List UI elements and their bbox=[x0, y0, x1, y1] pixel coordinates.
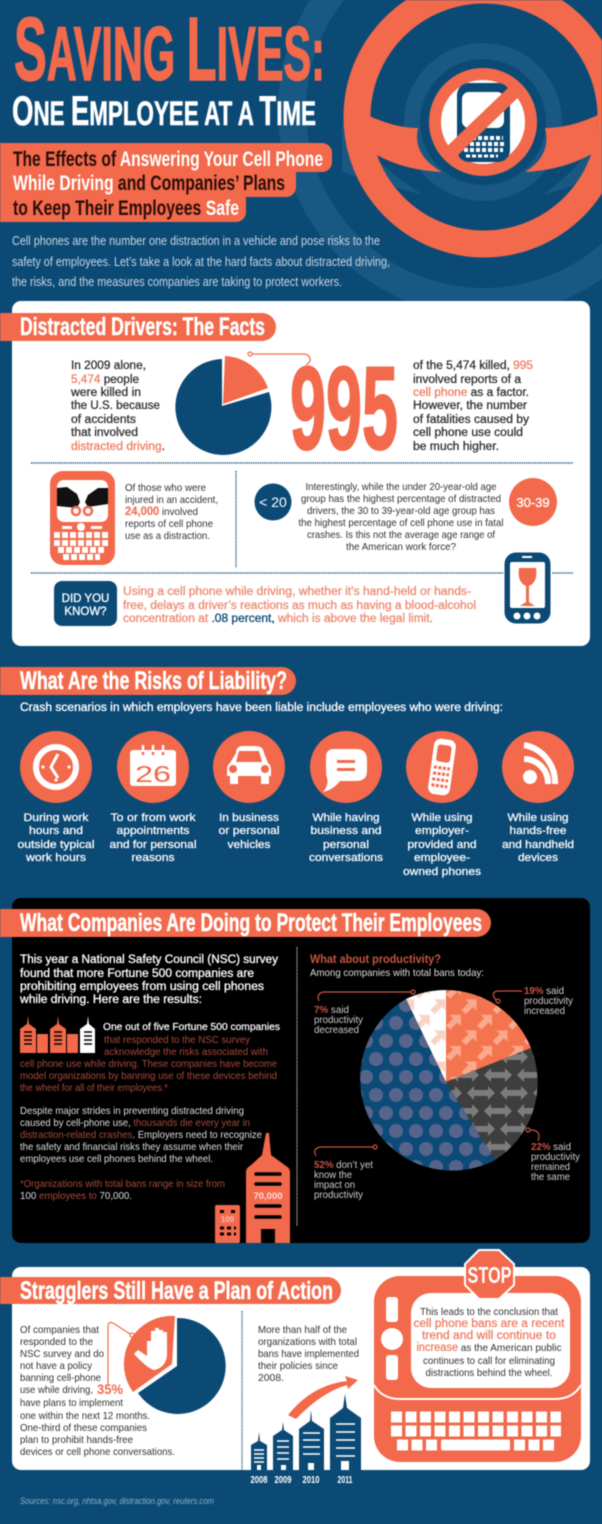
label: 22 percent: the same bbox=[531, 1172, 570, 1183]
text: despite major strides bbox=[20, 1105, 262, 1165]
text: age groups: the American work force? bbox=[346, 541, 456, 553]
text: one out of five: cell phone use while driving. These companies have become bbox=[20, 1058, 277, 1070]
icon: hand bbox=[134, 1328, 167, 1370]
icon: phone with car crash bbox=[50, 471, 115, 565]
title: SAVING LIVES: bbox=[14, 0, 325, 100]
text: stragglers plan: banning cell-phone bbox=[20, 1372, 101, 1384]
pie chart: 995 of 5474 bbox=[175, 356, 271, 455]
text: killed in 2009: that involved bbox=[71, 427, 138, 439]
scenario: work hours: work hours bbox=[25, 852, 87, 864]
scenario: hands-free: devices bbox=[518, 852, 559, 864]
text: since 2008: organizations with total bbox=[258, 1336, 357, 1348]
text: footnote: 100 employees to 70,000. bbox=[20, 1190, 132, 1202]
scenario: hands-free: and handheld bbox=[502, 839, 574, 851]
label: 19 percent bbox=[524, 986, 573, 1017]
did you know badge: DID YOU bbox=[62, 593, 109, 605]
scenario: appointments: To or from work bbox=[110, 812, 196, 824]
text: stragglers plan: plan to prohibit hands-free bbox=[20, 1434, 133, 1446]
badge: under 20 bbox=[254, 484, 292, 520]
text: stragglers plan: Of companies that bbox=[20, 1324, 99, 1336]
year labels: 2011 bbox=[338, 1475, 353, 1486]
text: despite major strides: the safety and financial risks they assume when their bbox=[20, 1141, 243, 1153]
did you know text: free, delays a driver’s reactions as much as having a blood-alcohol bbox=[123, 600, 476, 612]
badge: 30-39: 30-39 bbox=[516, 495, 550, 510]
scenario: phones: employer- bbox=[415, 825, 469, 837]
text: one out of five: One out of five Fortune 500 companies bbox=[103, 1021, 280, 1033]
label: 52 percent bbox=[314, 1160, 373, 1201]
text: conclusion bbox=[414, 1306, 565, 1379]
scenario: vehicles: vehicles bbox=[228, 839, 271, 851]
scenario: vehicles bbox=[213, 731, 285, 851]
text: NSC survey: found that more Fortune 500 companies are bbox=[20, 968, 254, 980]
text: one out of five: that responded to the NSC survey bbox=[104, 1034, 251, 1046]
text: cell phone factor: involved reports of a bbox=[413, 374, 522, 386]
text: NSC survey: while driving. Here are the results: bbox=[19, 994, 202, 1006]
scenario: phones bbox=[403, 731, 482, 878]
icon: five buildings bbox=[20, 1016, 95, 1053]
icon: small building 100 bbox=[215, 1205, 240, 1243]
label: 22 percent bbox=[531, 1142, 580, 1183]
text: crash scenarios: Crash scenarios in which employers have been liable include employees who were driving: bbox=[20, 702, 503, 714]
did you know badge: KNOW? bbox=[64, 606, 107, 618]
subtitle banner: The Effects of Answering Your Cell Phone bbox=[13, 148, 323, 171]
text: injured: 24,000 involved bbox=[125, 504, 198, 518]
connector bbox=[248, 352, 310, 365]
scenario: vehicles: In business bbox=[219, 812, 280, 824]
intro text bbox=[12, 233, 390, 289]
text: despite major strides: distraction-related crashes. Employers need to recognize bbox=[20, 1129, 262, 1141]
heading: productivity: Among companies with total bans today: bbox=[310, 967, 484, 979]
text: cell phone factor: cell phone as a factor. bbox=[413, 387, 529, 399]
did you know text: Using a cell phone while driving, whether it’s hand-held or hands- bbox=[123, 586, 471, 598]
intro text: the risks, and the measures companies are taking to protect workers. bbox=[12, 274, 342, 289]
text: since 2008: 2008. bbox=[258, 1372, 284, 1384]
text: stragglers plan bbox=[20, 1324, 175, 1458]
heading: stragglers: Stragglers Still Have a Plan of Action bbox=[20, 1277, 333, 1305]
text: NSC survey: prohibiting employees from using cell phones bbox=[20, 981, 264, 993]
scenario: work hours bbox=[18, 731, 94, 864]
label: 19 percent: increased bbox=[524, 1006, 565, 1017]
label: 7 percent: 7% said bbox=[314, 1005, 349, 1016]
text: NSC survey: This year a National Safety Council (NSC) survey bbox=[20, 954, 278, 966]
text: cell phone factor: be much higher. bbox=[413, 441, 499, 453]
big number 995: 995 bbox=[290, 343, 398, 475]
panel: what companies are doing bbox=[0, 898, 590, 1243]
badge: 30-39 bbox=[509, 478, 557, 526]
text: stragglers plan: responded to the bbox=[20, 1336, 93, 1348]
text: age groups: the highest percentage of cell phone use in fatal bbox=[298, 517, 504, 529]
text: age groups bbox=[298, 481, 504, 553]
text: injured: Of those who were bbox=[125, 482, 206, 494]
text: killed in 2009: of accidents bbox=[71, 414, 136, 426]
text: injured: use as a distraction. bbox=[125, 530, 210, 542]
text: conclusion: trend and will continue to bbox=[422, 1330, 556, 1342]
text: cell phone factor bbox=[413, 360, 533, 453]
text: injured bbox=[125, 482, 218, 542]
steering wheel emblem bbox=[292, 0, 602, 302]
label: 22 percent: productivity bbox=[531, 1152, 580, 1163]
label: 52 percent: productivity bbox=[314, 1190, 363, 1201]
title bbox=[12, 0, 325, 134]
scenario: conversations: conversations bbox=[309, 852, 384, 864]
scenario: appointments: and for personal bbox=[110, 839, 196, 851]
scenario: phones: While using bbox=[412, 812, 472, 824]
title: ONE EMPLOYEE AT A TIME bbox=[12, 87, 316, 134]
text: one out of five bbox=[20, 1021, 280, 1094]
text: despite major strides: employees use cell phones behind the wheel. bbox=[20, 1153, 213, 1165]
connectors bbox=[315, 990, 539, 1156]
figure: 35 percent: 35% bbox=[97, 1381, 124, 1397]
scenario: hands-free: While using bbox=[508, 812, 568, 824]
sources: Sources: nsc.org, nhtsa.gov, distraction.gov, reuters.com bbox=[20, 1496, 214, 1507]
heading: risks of liability: What Are the Risks of Liability? bbox=[20, 667, 287, 695]
text: injured: reports of cell phone bbox=[125, 518, 213, 530]
scenario: vehicles: or personal bbox=[218, 825, 280, 837]
text: stragglers plan: one within the next 12 months. bbox=[20, 1410, 150, 1422]
text: stragglers plan: devices or cell phone conversations. bbox=[20, 1446, 175, 1458]
text: cell phone factor: cell phone use could bbox=[413, 427, 523, 439]
text: stragglers plan: One-third of these companies bbox=[20, 1422, 147, 1434]
label: 7 percent bbox=[314, 1005, 363, 1036]
label: 7 percent: decreased bbox=[314, 1025, 359, 1036]
text: killed in 2009 bbox=[70, 360, 165, 453]
scenario: conversations: personal bbox=[323, 839, 369, 851]
text: conclusion: continues to call for eliminating bbox=[423, 1355, 555, 1367]
scenario: appointments: appointments bbox=[116, 825, 190, 837]
text: killed in 2009: 5,474 people bbox=[71, 374, 139, 386]
text: despite major strides: Despite major strides in preventing distracted driving bbox=[20, 1105, 244, 1117]
text: stragglers plan: have plans to implement bbox=[20, 1397, 123, 1409]
pie chart: productivity bbox=[360, 990, 538, 1171]
text: age groups: group has the highest percentage of distracted bbox=[301, 493, 501, 505]
subtitle banner: While Driving and Companies’ Plans bbox=[13, 172, 285, 195]
label: 52 percent: 52% don’t yet bbox=[314, 1160, 373, 1171]
scenario: conversations bbox=[309, 731, 384, 864]
scenario: work hours: During work bbox=[24, 812, 89, 824]
year labels: 2010 bbox=[302, 1475, 320, 1486]
did you know text: concentration at .08 percent, which is above the legal limit. bbox=[123, 613, 433, 625]
scenario: phones: employee- bbox=[414, 852, 470, 864]
text: killed in 2009: the U.S. because bbox=[71, 400, 160, 412]
text: conclusion: increase as the American public bbox=[416, 1342, 562, 1354]
text: since 2008 bbox=[258, 1324, 359, 1384]
stop sign: STOP bbox=[468, 1262, 512, 1288]
text: conclusion: distractions behind the wheel. bbox=[426, 1367, 552, 1379]
text: since 2008: their policies since bbox=[258, 1360, 338, 1372]
pie chart: 35 percent with hand bbox=[124, 1316, 226, 1414]
text: cell phone factor: However, the number bbox=[413, 400, 527, 412]
intro text: Cell phones are the number one distraction in a vehicle and pose risks to the bbox=[12, 233, 380, 248]
connector bbox=[108, 1322, 134, 1386]
text: stragglers plan: use while driving, bbox=[20, 1384, 93, 1396]
did you know badge bbox=[54, 581, 117, 626]
label: 52 percent: know the bbox=[314, 1170, 352, 1181]
label: 19 percent: productivity bbox=[524, 996, 573, 1007]
text: conclusion: cell phone bans are a recent bbox=[414, 1318, 565, 1330]
icon: big building 70000 bbox=[246, 1133, 290, 1243]
icon: small building 100: 100 bbox=[221, 1215, 235, 1224]
label: 22 percent: remained bbox=[531, 1162, 570, 1173]
text: conclusion: This leads to the conclusion that bbox=[420, 1306, 558, 1318]
heading: distracted drivers: Distracted Drivers: The Facts bbox=[20, 313, 265, 341]
text: one out of five: the wheel for all of their employees.* bbox=[20, 1082, 168, 1094]
scenario: phones: provided and bbox=[408, 839, 476, 851]
big phone with conclusion bbox=[374, 1276, 581, 1462]
year labels: 2009 bbox=[274, 1475, 292, 1486]
year labels bbox=[250, 1475, 353, 1486]
subtitle banner: to Keep Their Employees Safe bbox=[13, 197, 239, 220]
text: cell phone factor: of fatalities caused by bbox=[413, 414, 529, 426]
arrow: growth bbox=[288, 1376, 358, 1419]
text: since 2008: bans have implemented bbox=[258, 1348, 359, 1360]
subtitle banner bbox=[0, 143, 332, 222]
scenario: work hours: outside typical bbox=[18, 839, 94, 851]
text: despite major strides: caused by cell-phone use, thousands die every year in bbox=[20, 1117, 250, 1129]
text: stragglers plan: NSC survey and do bbox=[20, 1348, 104, 1360]
scenario: work hours: hours and bbox=[29, 825, 83, 837]
scenario: conversations: While having bbox=[312, 812, 380, 824]
text: since 2008: More than half of the bbox=[258, 1324, 347, 1336]
label: 19 percent: 19% said bbox=[524, 986, 564, 997]
heading: productivity: What about productivity? bbox=[310, 954, 441, 966]
text: one out of five: model organizations by banning use of these devices behind bbox=[20, 1070, 277, 1082]
label: 7 percent: productivity bbox=[314, 1015, 363, 1026]
stop sign bbox=[465, 1250, 514, 1299]
scenario: appointments: reasons bbox=[132, 852, 175, 864]
text: killed in 2009: In 2009 alone, bbox=[71, 360, 146, 372]
intro text: safety of employees. Let’s take a look at the hard facts about distracted driving, bbox=[12, 254, 390, 269]
badge: under 20: < 20 bbox=[259, 494, 287, 510]
scenario: conversations: business and bbox=[310, 825, 382, 837]
panel: stragglers bbox=[0, 1250, 590, 1486]
scenario: appointments: 26 bbox=[135, 761, 171, 787]
scenario: appointments bbox=[110, 731, 196, 864]
panel: distracted drivers facts bbox=[0, 301, 590, 646]
text: age groups: drivers, the 30 to 39-year-old age group has bbox=[307, 505, 495, 517]
text: footnote: *Organizations with total bans range in size from bbox=[20, 1178, 225, 1190]
skyline chart bbox=[251, 1394, 361, 1470]
scenario: phones: owned phones bbox=[403, 866, 482, 878]
icon: phone with wine glass bbox=[504, 552, 551, 624]
text: stragglers plan: not have a policy bbox=[20, 1360, 93, 1372]
did you know text bbox=[123, 586, 476, 625]
year labels: 2008 bbox=[250, 1475, 268, 1486]
text: footnote bbox=[20, 1178, 225, 1202]
text: killed in 2009: were killed in bbox=[70, 387, 141, 399]
scenario: hands-free bbox=[502, 731, 574, 864]
heading: distracted drivers bbox=[0, 313, 276, 341]
scenario: hands-free: hands-free bbox=[510, 825, 566, 837]
text: one out of five: acknowledge the risks associated with bbox=[104, 1046, 268, 1058]
text: age groups: Interestingly, while the under 20-year-old age bbox=[306, 481, 497, 493]
text: injured: injured in an accident, bbox=[125, 494, 218, 506]
icon: banned phone bbox=[447, 83, 519, 162]
heading: productivity bbox=[310, 954, 484, 979]
icon: big building 70000: 70,000 bbox=[253, 1191, 283, 1202]
label: 22 percent: 22% said bbox=[531, 1142, 571, 1153]
text: killed in 2009: distracted driving . bbox=[71, 441, 165, 453]
text: age groups: crashes. Is this not the average age range of bbox=[307, 529, 495, 541]
text: cell phone factor: of the 5,474 killed, 995 bbox=[413, 360, 533, 372]
label: 52 percent: impact on bbox=[314, 1180, 355, 1191]
text: NSC survey bbox=[19, 954, 278, 1006]
